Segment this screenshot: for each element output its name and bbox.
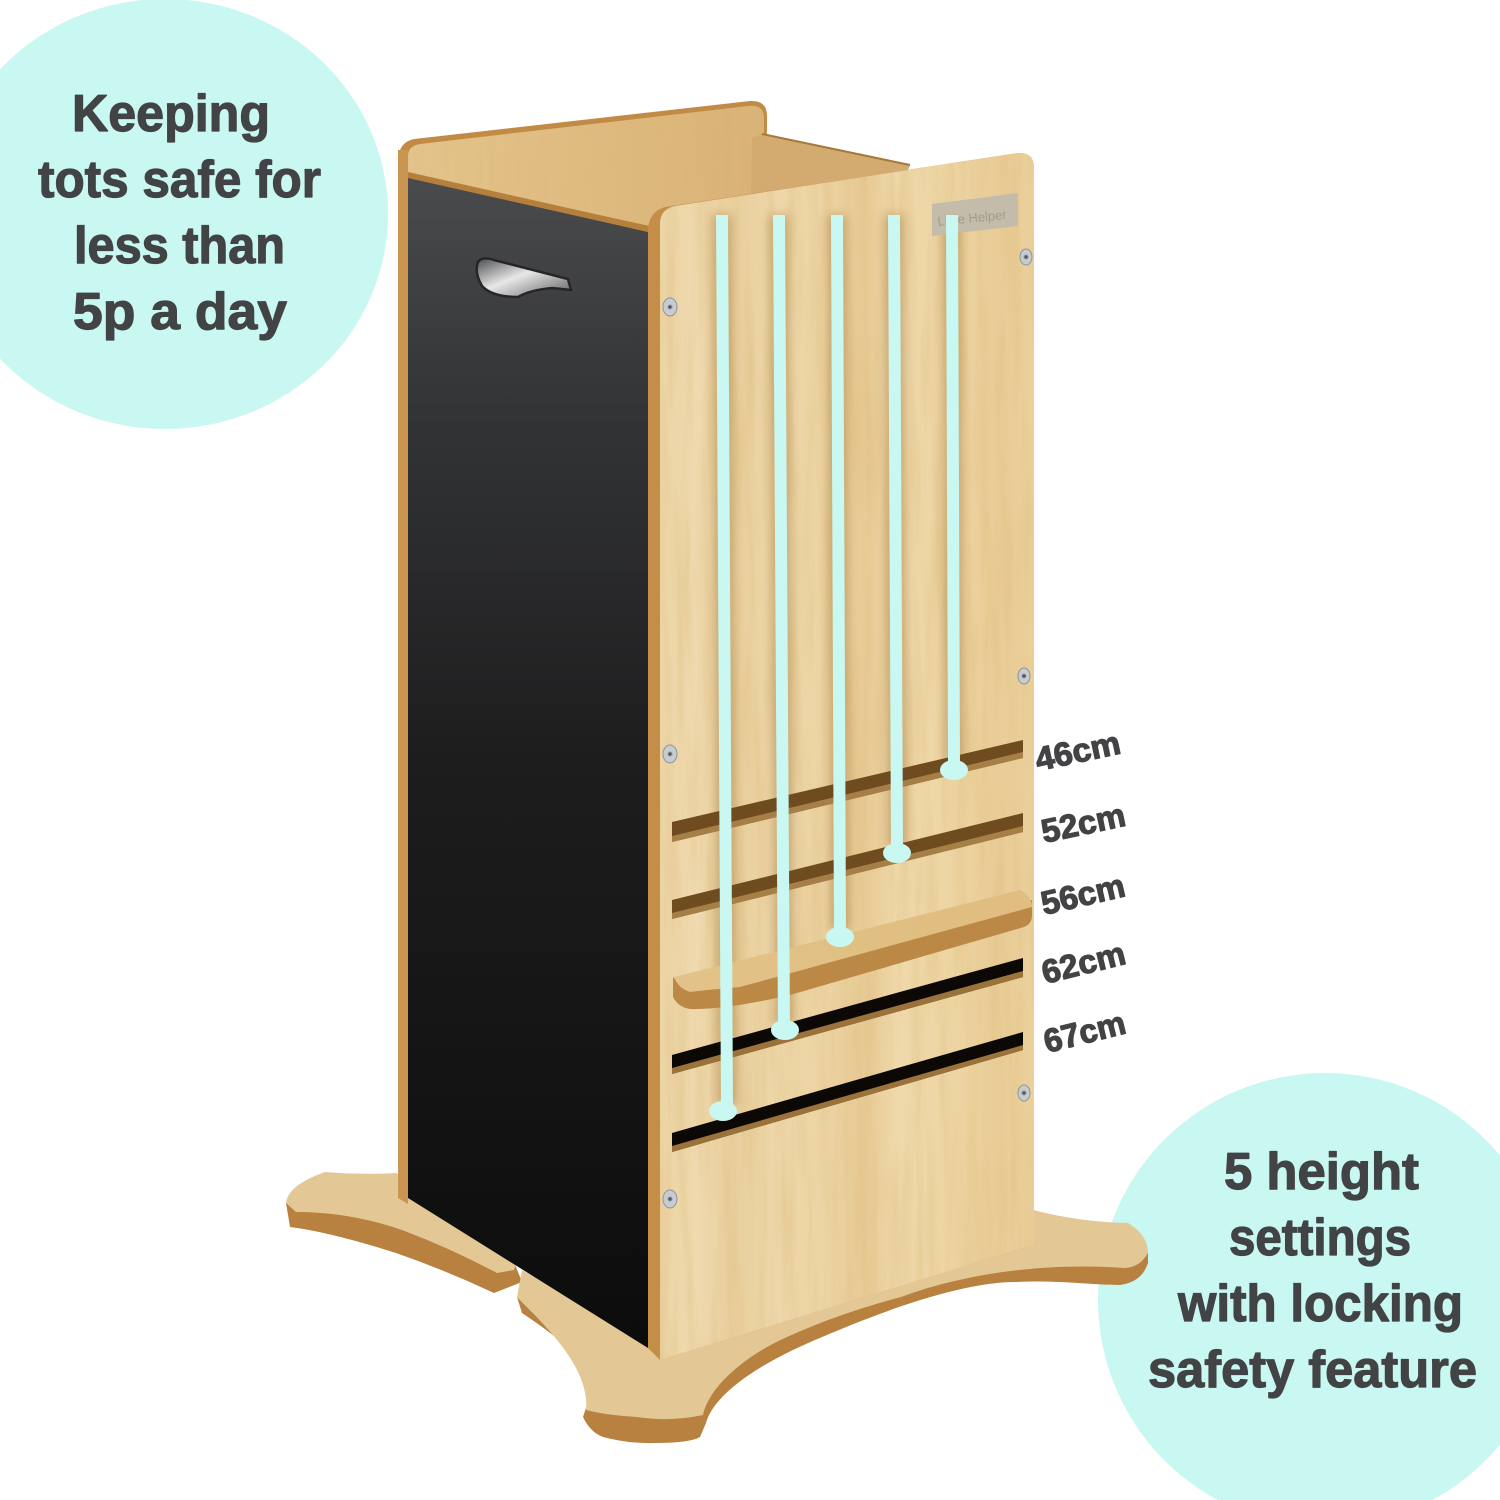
metal name plate xyxy=(932,193,1018,236)
heading: height settings callout xyxy=(1148,1143,1477,1399)
callout circle: top left xyxy=(0,0,388,429)
height labels: 52cm xyxy=(1038,796,1129,850)
left foot xyxy=(286,1172,522,1293)
step shelf xyxy=(673,890,1032,1009)
callout circle: bottom right xyxy=(1098,1073,1500,1500)
heading: height settings callout: with locking xyxy=(1177,1275,1463,1333)
heading: cost callout xyxy=(38,85,321,341)
front foot xyxy=(517,1210,1148,1443)
metal name plate: Little Helper xyxy=(937,207,1008,229)
product illustration: learning tower xyxy=(286,100,1148,1443)
heading: cost callout: tots safe for xyxy=(38,151,321,209)
metal handle xyxy=(477,258,571,297)
height labels: 62cm xyxy=(1038,934,1129,991)
height labels: 46cm xyxy=(1032,724,1124,778)
back panel xyxy=(400,101,910,232)
slot 1 xyxy=(672,740,1023,842)
height labels xyxy=(1032,724,1129,1060)
height labels: 56cm xyxy=(1037,867,1128,922)
screws xyxy=(663,249,1032,1208)
left edge strip xyxy=(398,150,408,1204)
front panel xyxy=(648,150,1038,1365)
slot 5 xyxy=(672,1032,1023,1152)
heading: cost callout: Keeping xyxy=(72,85,270,143)
slot 4 xyxy=(672,958,1023,1074)
heading: height settings callout: 5 height xyxy=(1224,1143,1419,1201)
blackboard side xyxy=(408,176,648,1348)
slot 2 xyxy=(672,813,1023,919)
top edge of blackboard xyxy=(408,172,648,232)
height labels: 67cm xyxy=(1040,1004,1129,1060)
height indicator lines xyxy=(709,215,968,1121)
heading: cost callout: 5p a day xyxy=(73,283,287,341)
heading: cost callout: less than xyxy=(74,217,285,275)
heading: height settings callout: safety feature xyxy=(1148,1341,1477,1399)
heading: height settings callout: settings xyxy=(1229,1209,1411,1267)
